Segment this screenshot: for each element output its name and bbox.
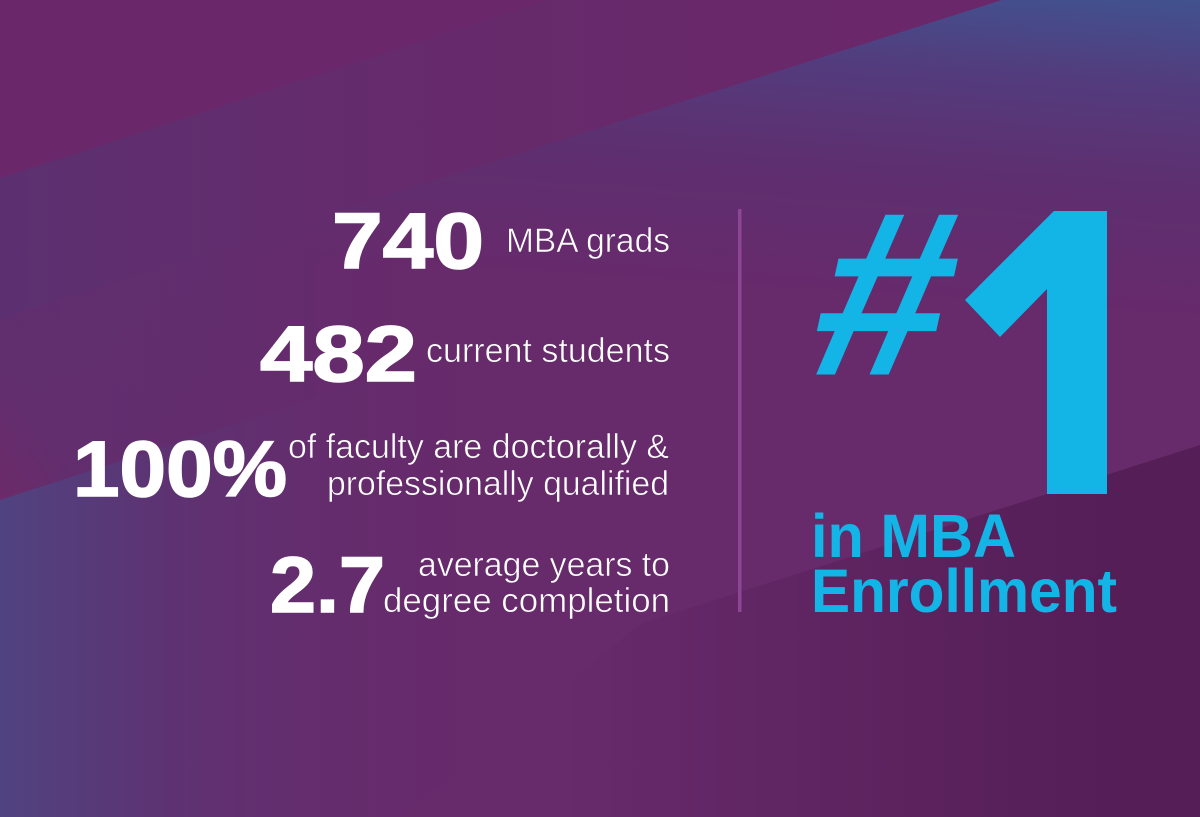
- numeral one: 1: [950, 123, 1179, 582]
- number 740: 740: [332, 196, 484, 285]
- number 2.7: 2.7: [270, 540, 385, 629]
- stat: 482 current students: [260, 309, 670, 398]
- headline: #1: [816, 211, 1107, 494]
- background: top-left wedge: [0, 0, 550, 178]
- label faculty line 2: professionally qualified: [327, 465, 669, 503]
- background: pink fade above lower diagonal: [0, 178, 500, 500]
- vertical divider: [738, 209, 742, 612]
- hash sign: #: [793, 165, 982, 424]
- label years line 1: average years to: [418, 546, 670, 584]
- background: left blue fade: [0, 0, 1002, 500]
- number 100%: 100%: [73, 424, 287, 513]
- stat: 2.7 years: [270, 540, 670, 629]
- number 482: 482: [260, 309, 417, 398]
- stat: 740 MBA grads: [332, 196, 670, 285]
- headline: in MBA Enrollment: [811, 502, 1117, 625]
- label current students: current students: [426, 332, 670, 370]
- background: lower right dark wedge: [400, 445, 1200, 817]
- Enrollment: Enrollment: [811, 557, 1117, 625]
- label MBA grads: MBA grads: [506, 222, 670, 260]
- in MBA: in MBA: [811, 502, 1016, 570]
- stat: 100% faculty: [73, 424, 669, 513]
- background: diagonal band: [0, 0, 1002, 319]
- label faculty line 1: of faculty are doctorally &: [288, 428, 669, 466]
- label years line 2: degree completion: [383, 582, 670, 620]
- background: lower panel: [0, 332, 520, 817]
